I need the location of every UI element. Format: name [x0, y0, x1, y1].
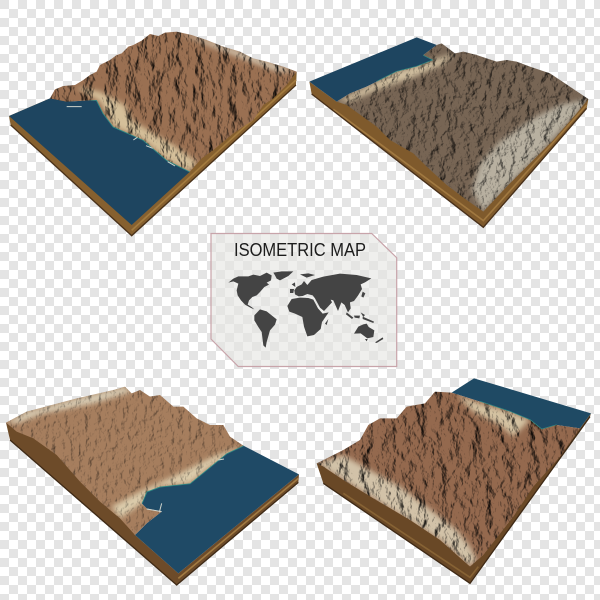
panel: isometric map card — [211, 234, 397, 366]
coastline — [80, 99, 190, 172]
sea — [9, 98, 190, 225]
terrain block: top right — [309, 37, 588, 228]
sea — [452, 378, 591, 429]
Eurasia — [294, 274, 371, 312]
terrain block: bottom right — [316, 378, 591, 584]
sea — [309, 37, 437, 102]
title: ISOMETRIC MAP — [234, 240, 366, 260]
side walls — [317, 413, 591, 583]
side walls — [309, 82, 588, 227]
South America — [254, 309, 277, 348]
land relief — [337, 44, 588, 212]
card background — [211, 234, 397, 366]
coastline — [377, 55, 433, 82]
North America — [228, 273, 272, 309]
coastline — [480, 402, 557, 429]
land relief — [316, 392, 580, 566]
side walls — [6, 422, 299, 585]
side walls — [9, 72, 297, 236]
land relief — [6, 386, 244, 535]
Australia — [354, 324, 374, 338]
Greenland — [273, 271, 293, 280]
port breakwater — [147, 459, 224, 512]
islands — [290, 289, 383, 343]
sea — [135, 446, 299, 573]
coastline — [142, 446, 243, 503]
port breakwater — [67, 107, 175, 166]
terrain block: top left — [0, 30, 300, 240]
Africa — [287, 298, 329, 336]
terrain block: bottom left — [0, 375, 300, 590]
world map — [228, 271, 383, 348]
land relief — [50, 32, 296, 172]
